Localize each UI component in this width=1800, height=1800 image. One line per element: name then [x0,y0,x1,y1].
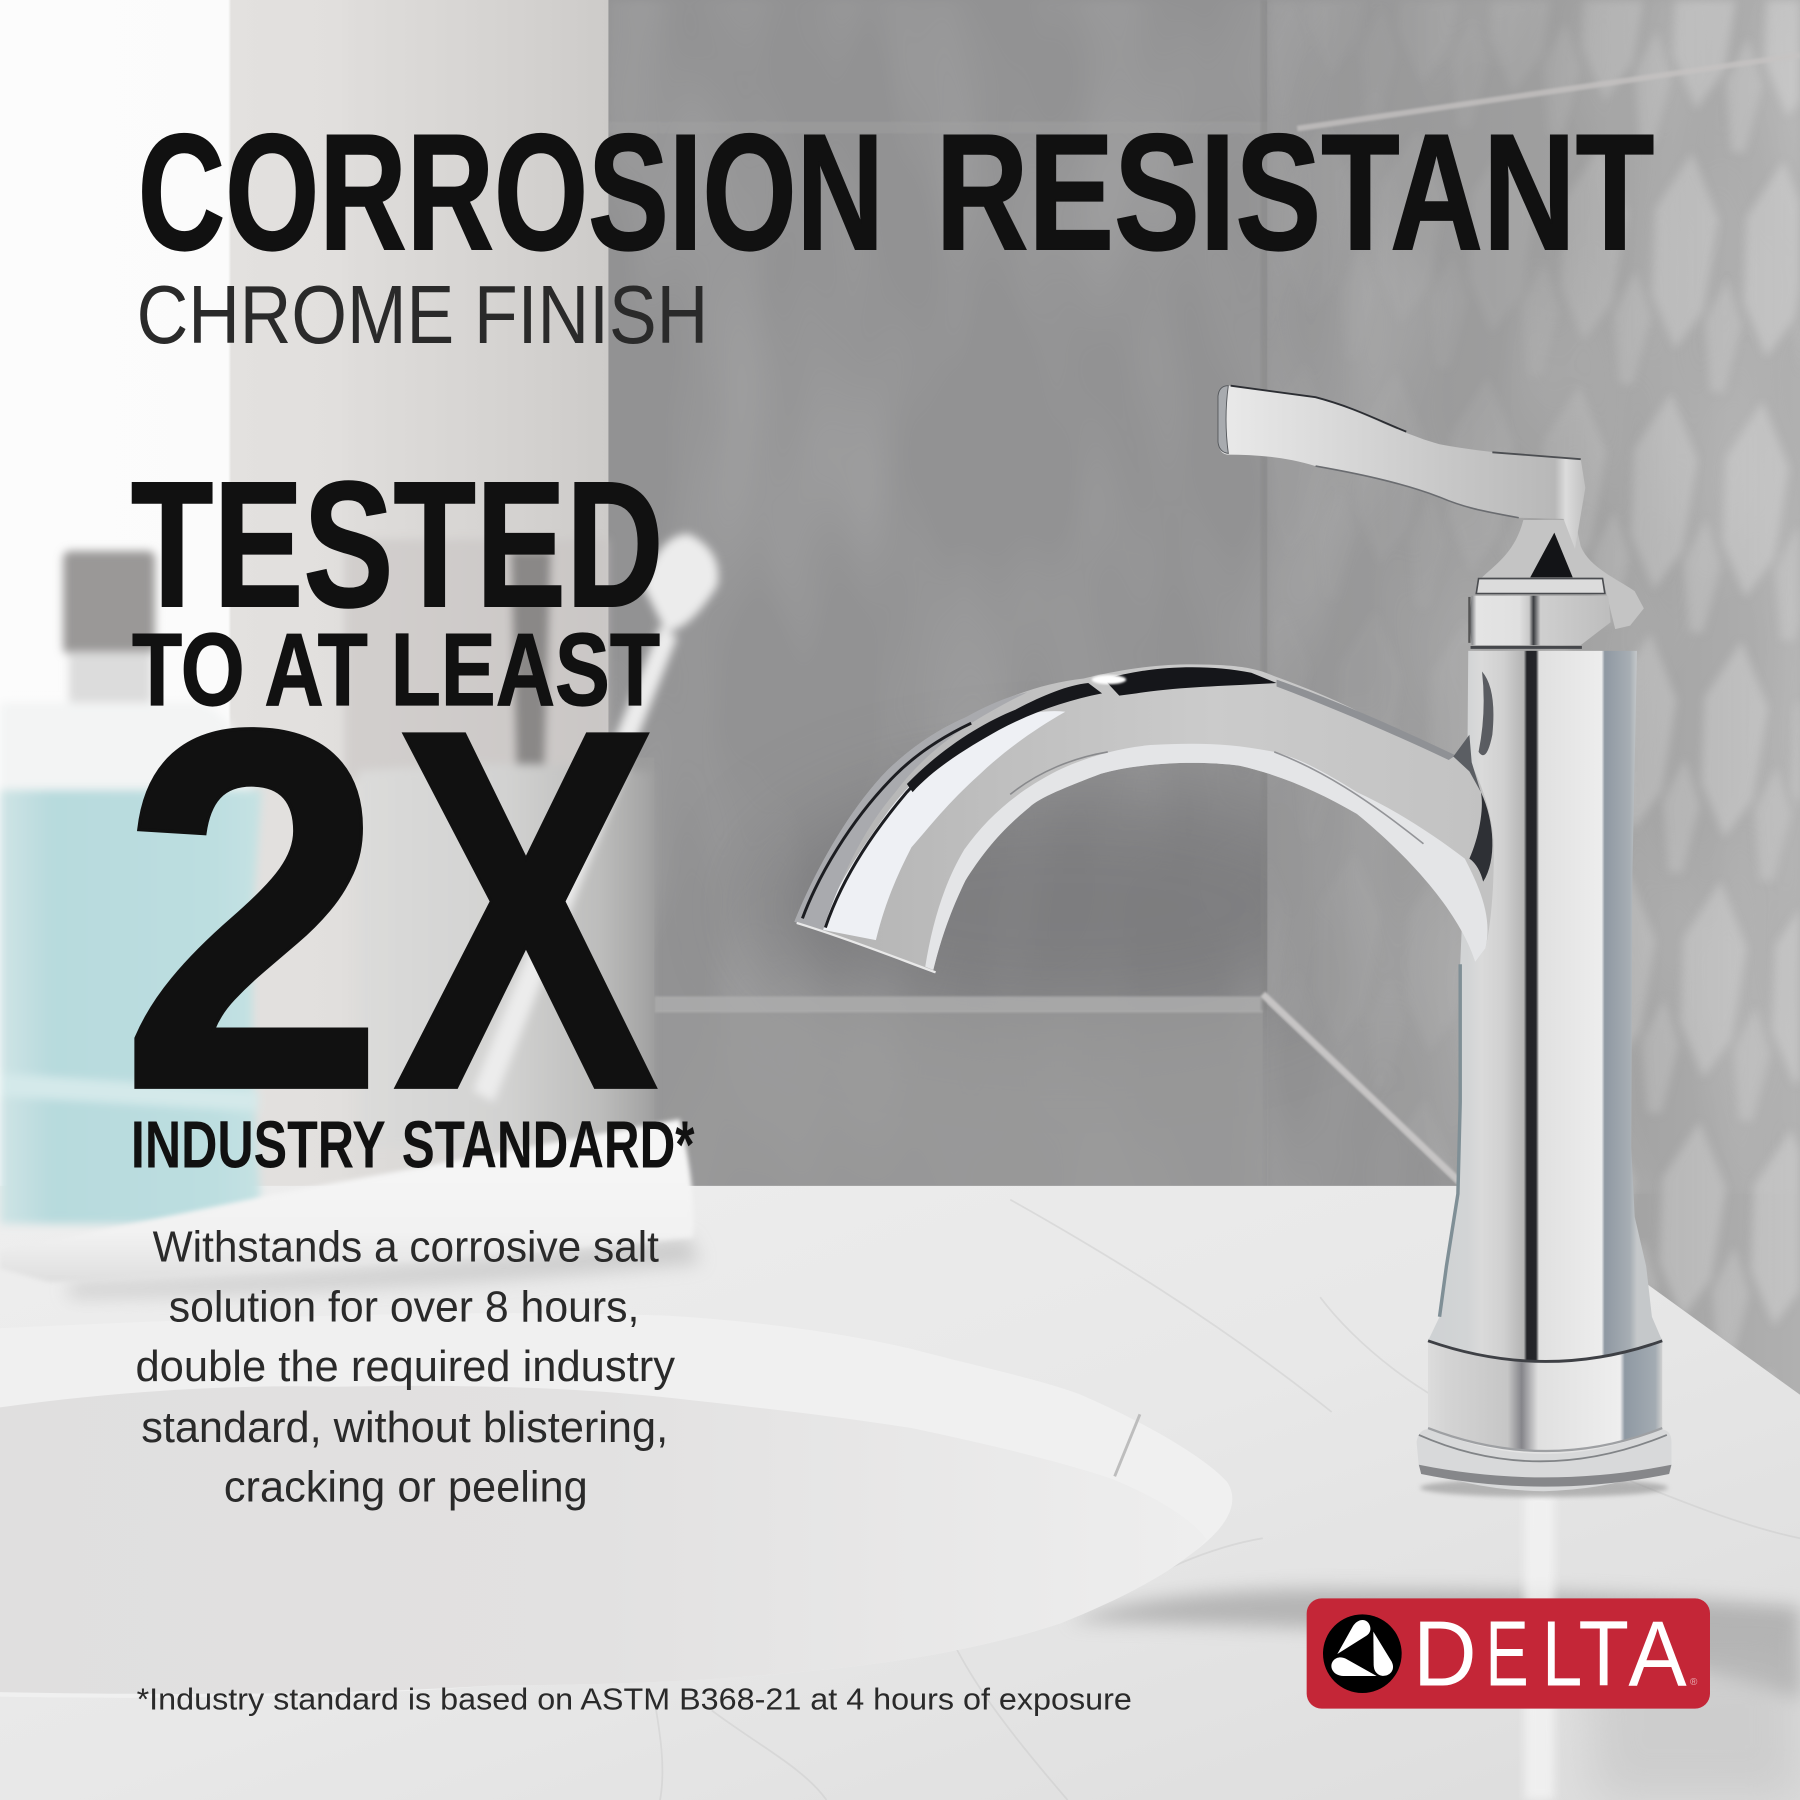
body copy [135,1224,675,1512]
faucet neck reflection [1479,672,1493,755]
faucet handle [1218,386,1585,549]
logo wordmark: A [1628,1602,1687,1706]
spout silver outer band [794,692,1027,930]
spout joint crescent [1469,792,1492,882]
faucet [794,386,1671,1497]
mouthwash bottle [0,551,262,1224]
subheading: CHROME FINISH [137,268,708,361]
spout rim band [925,744,1487,970]
faucet base collar [1428,1339,1662,1451]
column left edge reflection [1440,964,1460,1317]
to at least: TO AT LEAST [132,611,660,727]
logo wordmark [1413,1602,1687,1706]
countertop [0,1186,1800,1800]
body copy: Withstands a corrosive salt [153,1224,659,1272]
faucet column [1428,651,1662,1361]
2x stat: multiplier: X [393,622,661,1196]
logo wordmark: T [1578,1602,1629,1706]
spout glint [1092,675,1126,684]
logo wordmark: E [1485,1602,1529,1706]
patterned side wall [1263,0,1800,1401]
tile wall [0,0,1800,1423]
logo mark [1323,1614,1402,1693]
faucet spout [794,664,1494,972]
handle end cap reflection [1218,386,1228,453]
left pale wall panel [0,0,654,1194]
delta logo [1307,1598,1710,1709]
2x stat: numeral: 2 [119,622,386,1196]
tested: TESTED [131,444,664,644]
sink [0,1313,1232,1698]
body copy: cracking or peeling [224,1464,588,1512]
logo wordmark: L [1542,1602,1582,1706]
footnote: *Industry standard is based on ASTM B368-21 at 4 hours of exposure [137,1681,1132,1716]
headline: corrosion: CORROSION [138,100,884,285]
industry: INDUSTRY [131,1108,386,1182]
column collar line [1428,1341,1662,1361]
faucet cap [1469,520,1644,647]
body copy: double the required industry [135,1343,675,1391]
toothbrush glass [344,534,718,1148]
logo wordmark: D [1413,1602,1477,1706]
body copy: standard, without blistering, [141,1404,668,1452]
spout white reflection band [823,711,1065,940]
faucet base flange [1417,1429,1671,1497]
spout dark streaks [802,712,1022,928]
body copy: solution for over 8 hours, [169,1283,639,1331]
standard: STANDARD* [402,1108,695,1182]
toothpaste tube [0,1119,700,1297]
registered mark: ® [1690,1677,1698,1688]
